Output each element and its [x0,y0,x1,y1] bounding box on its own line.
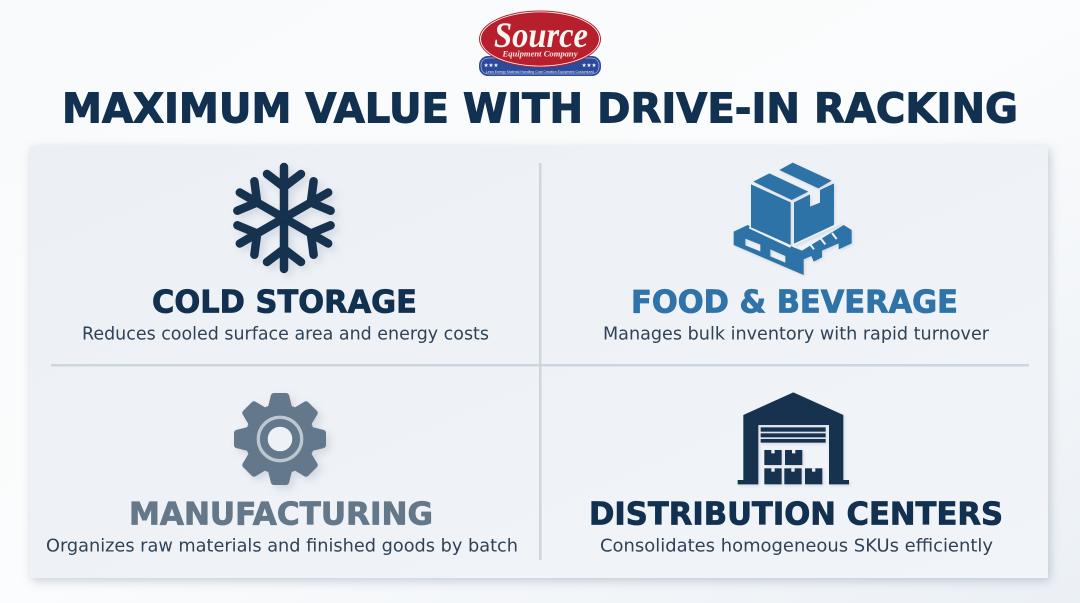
logo: Source Equipment Company: ★★★ [484,63,498,69]
title: MAXIMUM VALUE WITH DRIVE-IN RACKING [62,84,1018,132]
logo: Source Equipment Company [479,10,601,76]
logo: Source Equipment Company: Equipment Company [501,48,578,58]
logo: Source Equipment Company: Lean Energy Material Handling Cost Creation Equipment Customized [486,69,594,74]
logo: Source Equipment Company: ★★★ [582,63,596,69]
panel: industries grid [30,146,1048,578]
logo: Source Equipment Company: Source [494,15,588,55]
text: food and beverage description: Manages bulk inventory with rapid turnover [603,324,990,344]
heading: cold storage: COLD STORAGE [152,284,417,320]
icon: gear [234,393,326,485]
panel: distribution centers [589,392,1003,556]
text: cold storage description: Reduces cooled surface area and energy costs [82,324,489,344]
text: distribution centers description: Consolidates homogeneous SKUs efficiently [600,536,993,556]
heading: manufacturing: MANUFACTURING [129,496,433,532]
panel: manufacturing [46,393,518,556]
panel: cold storage [82,167,489,344]
heading: distribution centers: DISTRIBUTION CENTERS [589,496,1003,532]
heading: food and beverage: FOOD & BEVERAGE [631,284,958,320]
icon: boxed pallet [734,163,852,275]
panel: food and beverage [603,163,990,344]
icon: warehouse [738,392,849,484]
icon: snowflake [231,167,337,269]
text: manufacturing description: Organizes raw materials and finished goods by batch [46,536,518,556]
